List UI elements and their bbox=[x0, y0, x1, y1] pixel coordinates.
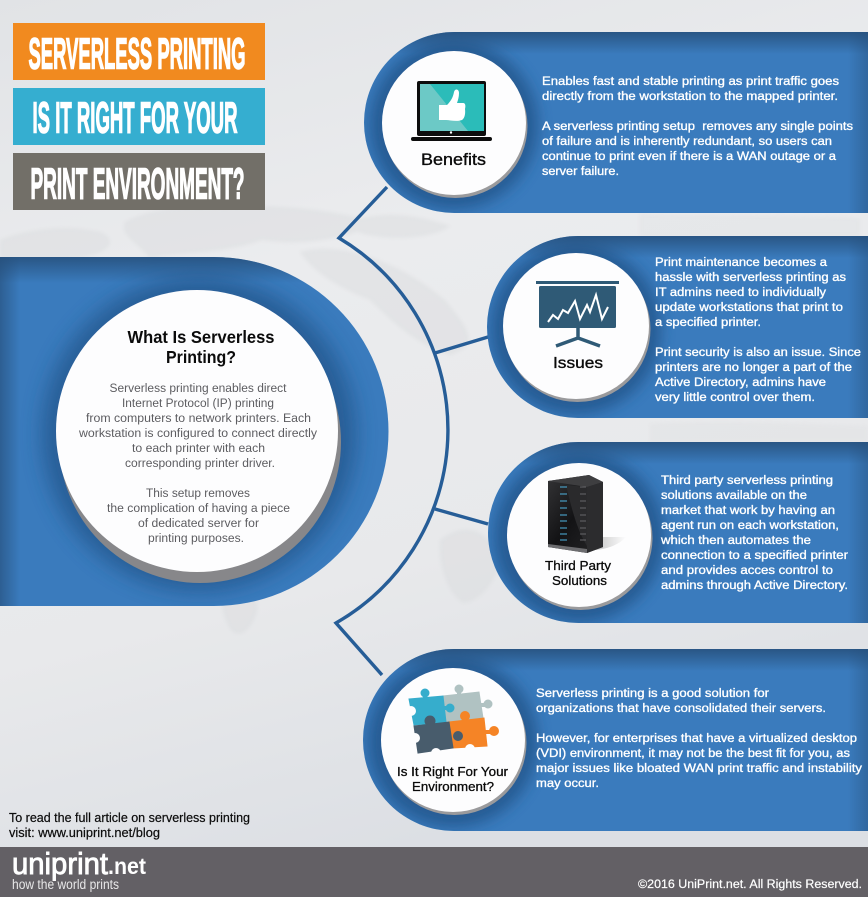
panel body text: update workstations that print to bbox=[655, 300, 843, 314]
label: third party solutions: Third Party bbox=[545, 558, 612, 573]
icon: laptop with thumbs up bbox=[411, 81, 492, 141]
panel body text: market that work by having an bbox=[661, 503, 835, 517]
label: is it right for your environment bbox=[397, 764, 509, 794]
white circle bbox=[503, 253, 649, 399]
panel shape bbox=[355, 649, 868, 831]
panel body text: Print security is also an issue. Since bbox=[655, 345, 861, 359]
logo: uniprint.net: how the world prints bbox=[12, 877, 119, 892]
text: IS IT RIGHT FOR YOUR bbox=[32, 94, 238, 142]
panel body text: corresponding printer driver. bbox=[125, 456, 275, 470]
panel body text: printers are no longer a part of the bbox=[655, 360, 852, 374]
label: benefits: Benefits bbox=[421, 151, 486, 169]
panel body text: and provides acces control to bbox=[661, 563, 833, 577]
panel body text: Internet Protocol (IP) printing bbox=[122, 396, 274, 410]
panel body text: very little control over them. bbox=[655, 390, 815, 404]
background world map bbox=[0, 206, 868, 634]
panel: issues bbox=[480, 236, 868, 418]
panel body text: agent run on each workstation, bbox=[661, 518, 839, 532]
panel body text: workstation is configured to connect directly bbox=[78, 426, 318, 440]
text: SERVERLESS PRINTING bbox=[28, 30, 246, 78]
panel body text: hassle with serverless printing as bbox=[655, 270, 846, 284]
panel body text: However, for enterprises that have a virtualized desktop bbox=[536, 731, 857, 745]
panel body text: Active Directory, admins have bbox=[655, 375, 826, 389]
panel body text: admins through Active Directory. bbox=[661, 578, 848, 592]
panel body text: Print maintenance becomes a bbox=[655, 255, 827, 269]
title line 1 bbox=[13, 23, 265, 80]
panel body text: IT admins need to individually bbox=[655, 285, 827, 299]
panel body text: printing purposes. bbox=[148, 531, 244, 545]
panel body text: Serverless printing enables direct bbox=[110, 381, 287, 395]
white circle bbox=[56, 290, 338, 572]
panel body text: (VDI) environment, it may not be the best fit for you, as bbox=[536, 746, 850, 760]
panel body text: Third party serverless printing bbox=[661, 473, 833, 487]
white circle bbox=[382, 51, 526, 195]
label: is it right for your environment: Is It Right For Your bbox=[397, 764, 509, 779]
panel body text: solutions available on the bbox=[661, 488, 807, 502]
white circle bbox=[381, 668, 525, 812]
panel: what is serverless printing bbox=[0, 257, 400, 606]
panel body text: A serverless printing setup removes any single points bbox=[542, 119, 853, 133]
panel body text: directly from the workstation to the mapped printer. bbox=[542, 89, 838, 103]
panel body text: continue to print even if there is a WAN outage or a bbox=[542, 149, 836, 163]
panel body text: the complication of having a piece bbox=[107, 501, 290, 515]
circle drop shadow bbox=[382, 671, 526, 815]
copyright: ©2016 UniPrint.net. All Rights Reserved. bbox=[638, 877, 862, 891]
panel shape bbox=[0, 257, 400, 606]
panel heading: What Is Serverless bbox=[128, 327, 275, 347]
logo: uniprint.net: uniprint bbox=[12, 846, 108, 881]
panel shape bbox=[360, 32, 868, 213]
panel heading bbox=[128, 327, 275, 367]
icon: jigsaw puzzle bbox=[406, 685, 498, 758]
panel body text: to each printer with each bbox=[132, 441, 265, 455]
panel body text: of dedicated server for bbox=[138, 516, 259, 530]
label: issues: Issues bbox=[553, 355, 603, 372]
circle drop shadow bbox=[59, 301, 341, 583]
panel body text bbox=[542, 74, 853, 178]
panel: benefits bbox=[360, 32, 868, 213]
text block: read full article: To read the full article on serverless printing bbox=[9, 811, 250, 825]
text block: read full article bbox=[9, 811, 250, 840]
panel body text: This setup removes bbox=[146, 486, 250, 500]
panel body text bbox=[536, 686, 863, 790]
panel: is it right for your environment bbox=[355, 649, 868, 831]
panel body text: of failure and is inherently redundant, so users can bbox=[542, 134, 832, 148]
footer bar bbox=[0, 846, 868, 897]
text: PRINT ENVIRONMENT? bbox=[30, 160, 244, 208]
connector lines and arc bbox=[336, 187, 488, 675]
circle drop shadow bbox=[384, 54, 528, 198]
title line 3 bbox=[13, 153, 265, 210]
panel body text: major issues like bloated WAN print traffic and instability bbox=[536, 761, 863, 775]
label: third party solutions bbox=[545, 558, 612, 588]
label: third party solutions: Solutions bbox=[552, 573, 607, 588]
panel heading: Printing? bbox=[166, 347, 236, 367]
panel body text: Enables fast and stable printing as print traffic goes bbox=[542, 74, 839, 88]
logo: uniprint.net bbox=[12, 846, 146, 892]
text block: read full article: visit: www.uniprint.net/blog bbox=[9, 826, 160, 840]
white circle bbox=[507, 463, 651, 607]
panel shape bbox=[480, 442, 868, 623]
panel shape bbox=[480, 236, 868, 418]
icon: presentation board with chart bbox=[536, 281, 619, 346]
panel: third party solutions bbox=[480, 442, 868, 623]
panel body text bbox=[660, 473, 848, 592]
panel body text: server failure. bbox=[542, 164, 619, 178]
panel body text: a specified printer. bbox=[655, 315, 761, 329]
circle drop shadow bbox=[504, 256, 650, 402]
logo: uniprint.net: .net bbox=[108, 853, 146, 879]
circle drop shadow bbox=[508, 466, 652, 610]
panel body text bbox=[655, 255, 861, 404]
panel body text: may occur. bbox=[536, 776, 599, 790]
panel body text: from computers to network printers. Each bbox=[86, 411, 311, 425]
panel body text: which then automates the bbox=[660, 533, 811, 547]
panel body text: Serverless printing is a good solution for bbox=[536, 686, 769, 700]
title line 2 bbox=[13, 88, 265, 145]
title banner bbox=[13, 23, 265, 210]
panel body text bbox=[78, 381, 318, 545]
panel body text: organizations that have consolidated their servers. bbox=[536, 701, 826, 715]
icon: server rack bbox=[548, 475, 626, 553]
label: is it right for your environment: Environment? bbox=[412, 779, 494, 794]
panel body text: connection to a specified printer bbox=[661, 548, 848, 562]
